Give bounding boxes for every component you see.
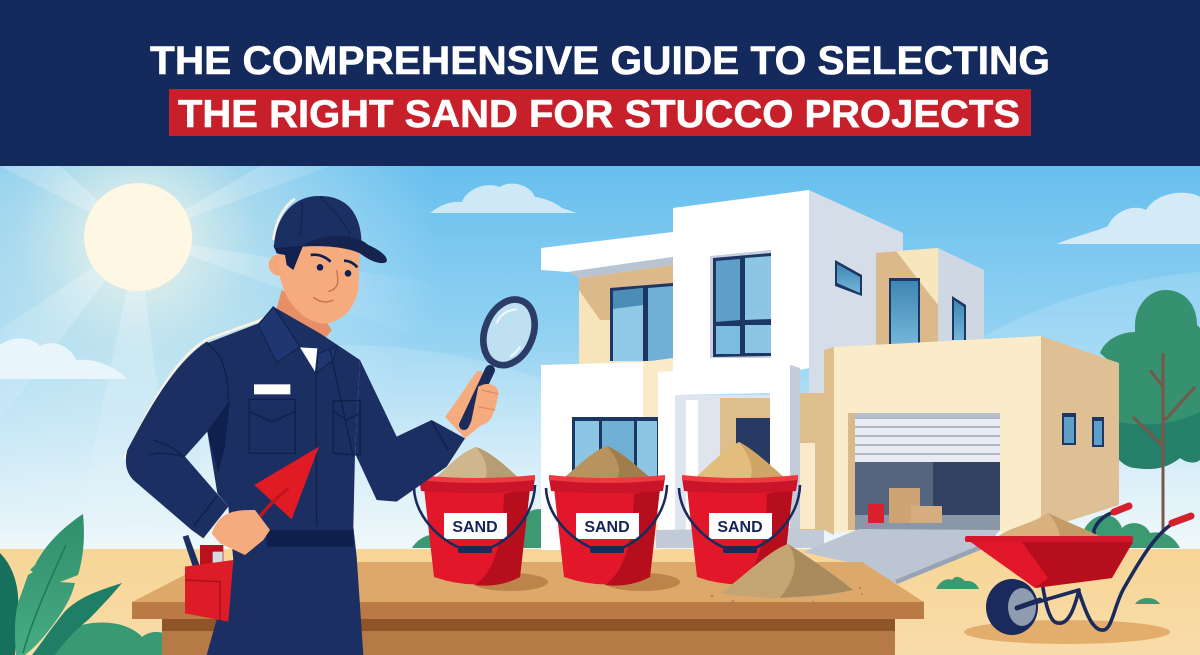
upper small window bbox=[835, 260, 862, 296]
sky hills bbox=[200, 272, 1200, 548]
sun glow and rays bbox=[0, 166, 560, 560]
cap bbox=[274, 196, 387, 263]
bucket 3 with sand bbox=[679, 442, 800, 586]
ground tufts bbox=[936, 577, 1160, 604]
garage block bbox=[824, 336, 1119, 535]
neck bbox=[277, 290, 332, 350]
left upper wall bbox=[579, 265, 673, 366]
bucket 1 with sand bbox=[414, 447, 548, 591]
tree right bbox=[1100, 290, 1200, 537]
left hand bbox=[212, 510, 270, 555]
title line 2: THE RIGHT SAND FOR STUCCO PROJECTS bbox=[178, 93, 1020, 136]
header bar bbox=[0, 0, 1200, 166]
cloud top center bbox=[430, 184, 577, 213]
garage door bbox=[848, 413, 1000, 530]
sun bbox=[84, 183, 192, 291]
upper block side wall bbox=[809, 190, 903, 400]
upper right window bbox=[710, 250, 771, 358]
magnifying glass bbox=[464, 292, 544, 425]
collar bbox=[258, 307, 337, 373]
tray bbox=[965, 538, 1133, 588]
large leaf bbox=[15, 514, 84, 655]
fingers bbox=[470, 384, 499, 427]
hand holding magnifier bbox=[445, 371, 488, 438]
loose sand pile bbox=[711, 544, 863, 603]
torso and legs bbox=[207, 307, 363, 655]
right arm bbox=[355, 360, 465, 502]
left upper window bbox=[610, 283, 673, 361]
bush bbox=[42, 623, 163, 655]
bucket 2 with sand: SAND bbox=[584, 519, 630, 536]
worker figure bbox=[124, 196, 544, 655]
ground bbox=[0, 549, 1200, 655]
background sky bbox=[0, 166, 1200, 550]
lower left block bbox=[541, 362, 643, 550]
sleeve seams bbox=[148, 344, 228, 527]
bucket 3 with sand: SAND bbox=[717, 519, 763, 536]
left arm bbox=[126, 342, 228, 538]
left roof slab bbox=[541, 232, 673, 272]
name tag bbox=[254, 384, 290, 394]
bucket 2 with sand bbox=[546, 446, 680, 591]
head bbox=[269, 243, 360, 323]
body outline halo bbox=[124, 199, 295, 458]
lower window bbox=[572, 417, 658, 497]
wheelbarrow bbox=[964, 506, 1191, 644]
porch bbox=[656, 365, 824, 548]
bushes behind scene bbox=[412, 509, 1180, 548]
tower bbox=[876, 248, 984, 345]
driveway bbox=[803, 529, 1000, 584]
table bbox=[132, 562, 924, 655]
trowel bbox=[254, 447, 319, 519]
side windows bbox=[1062, 413, 1104, 447]
title highlight bar bbox=[169, 89, 1031, 136]
grips bbox=[1114, 506, 1191, 523]
house bbox=[541, 190, 1119, 550]
connecting wall bbox=[800, 393, 824, 530]
cloud left bbox=[0, 338, 127, 379]
dark leaf bbox=[0, 553, 18, 655]
right leaf bbox=[32, 583, 122, 655]
wheel bbox=[986, 579, 1038, 635]
left foliage bbox=[0, 514, 163, 655]
white undershirt bbox=[300, 347, 317, 372]
frame bbox=[1017, 512, 1172, 630]
tool pouch bbox=[183, 535, 233, 622]
left chest pocket bbox=[249, 399, 295, 453]
sand load bbox=[994, 513, 1107, 540]
bucket 1 with sand: SAND bbox=[452, 519, 498, 536]
upper block front bbox=[673, 190, 809, 395]
belt bbox=[267, 530, 353, 547]
cloud right bbox=[1057, 193, 1200, 244]
title line 1: THE COMPREHENSIVE GUIDE TO SELECTING bbox=[150, 39, 1050, 83]
uniform seams bbox=[316, 350, 448, 527]
arm shadow bbox=[207, 400, 230, 473]
right chest pocket bbox=[333, 401, 360, 455]
